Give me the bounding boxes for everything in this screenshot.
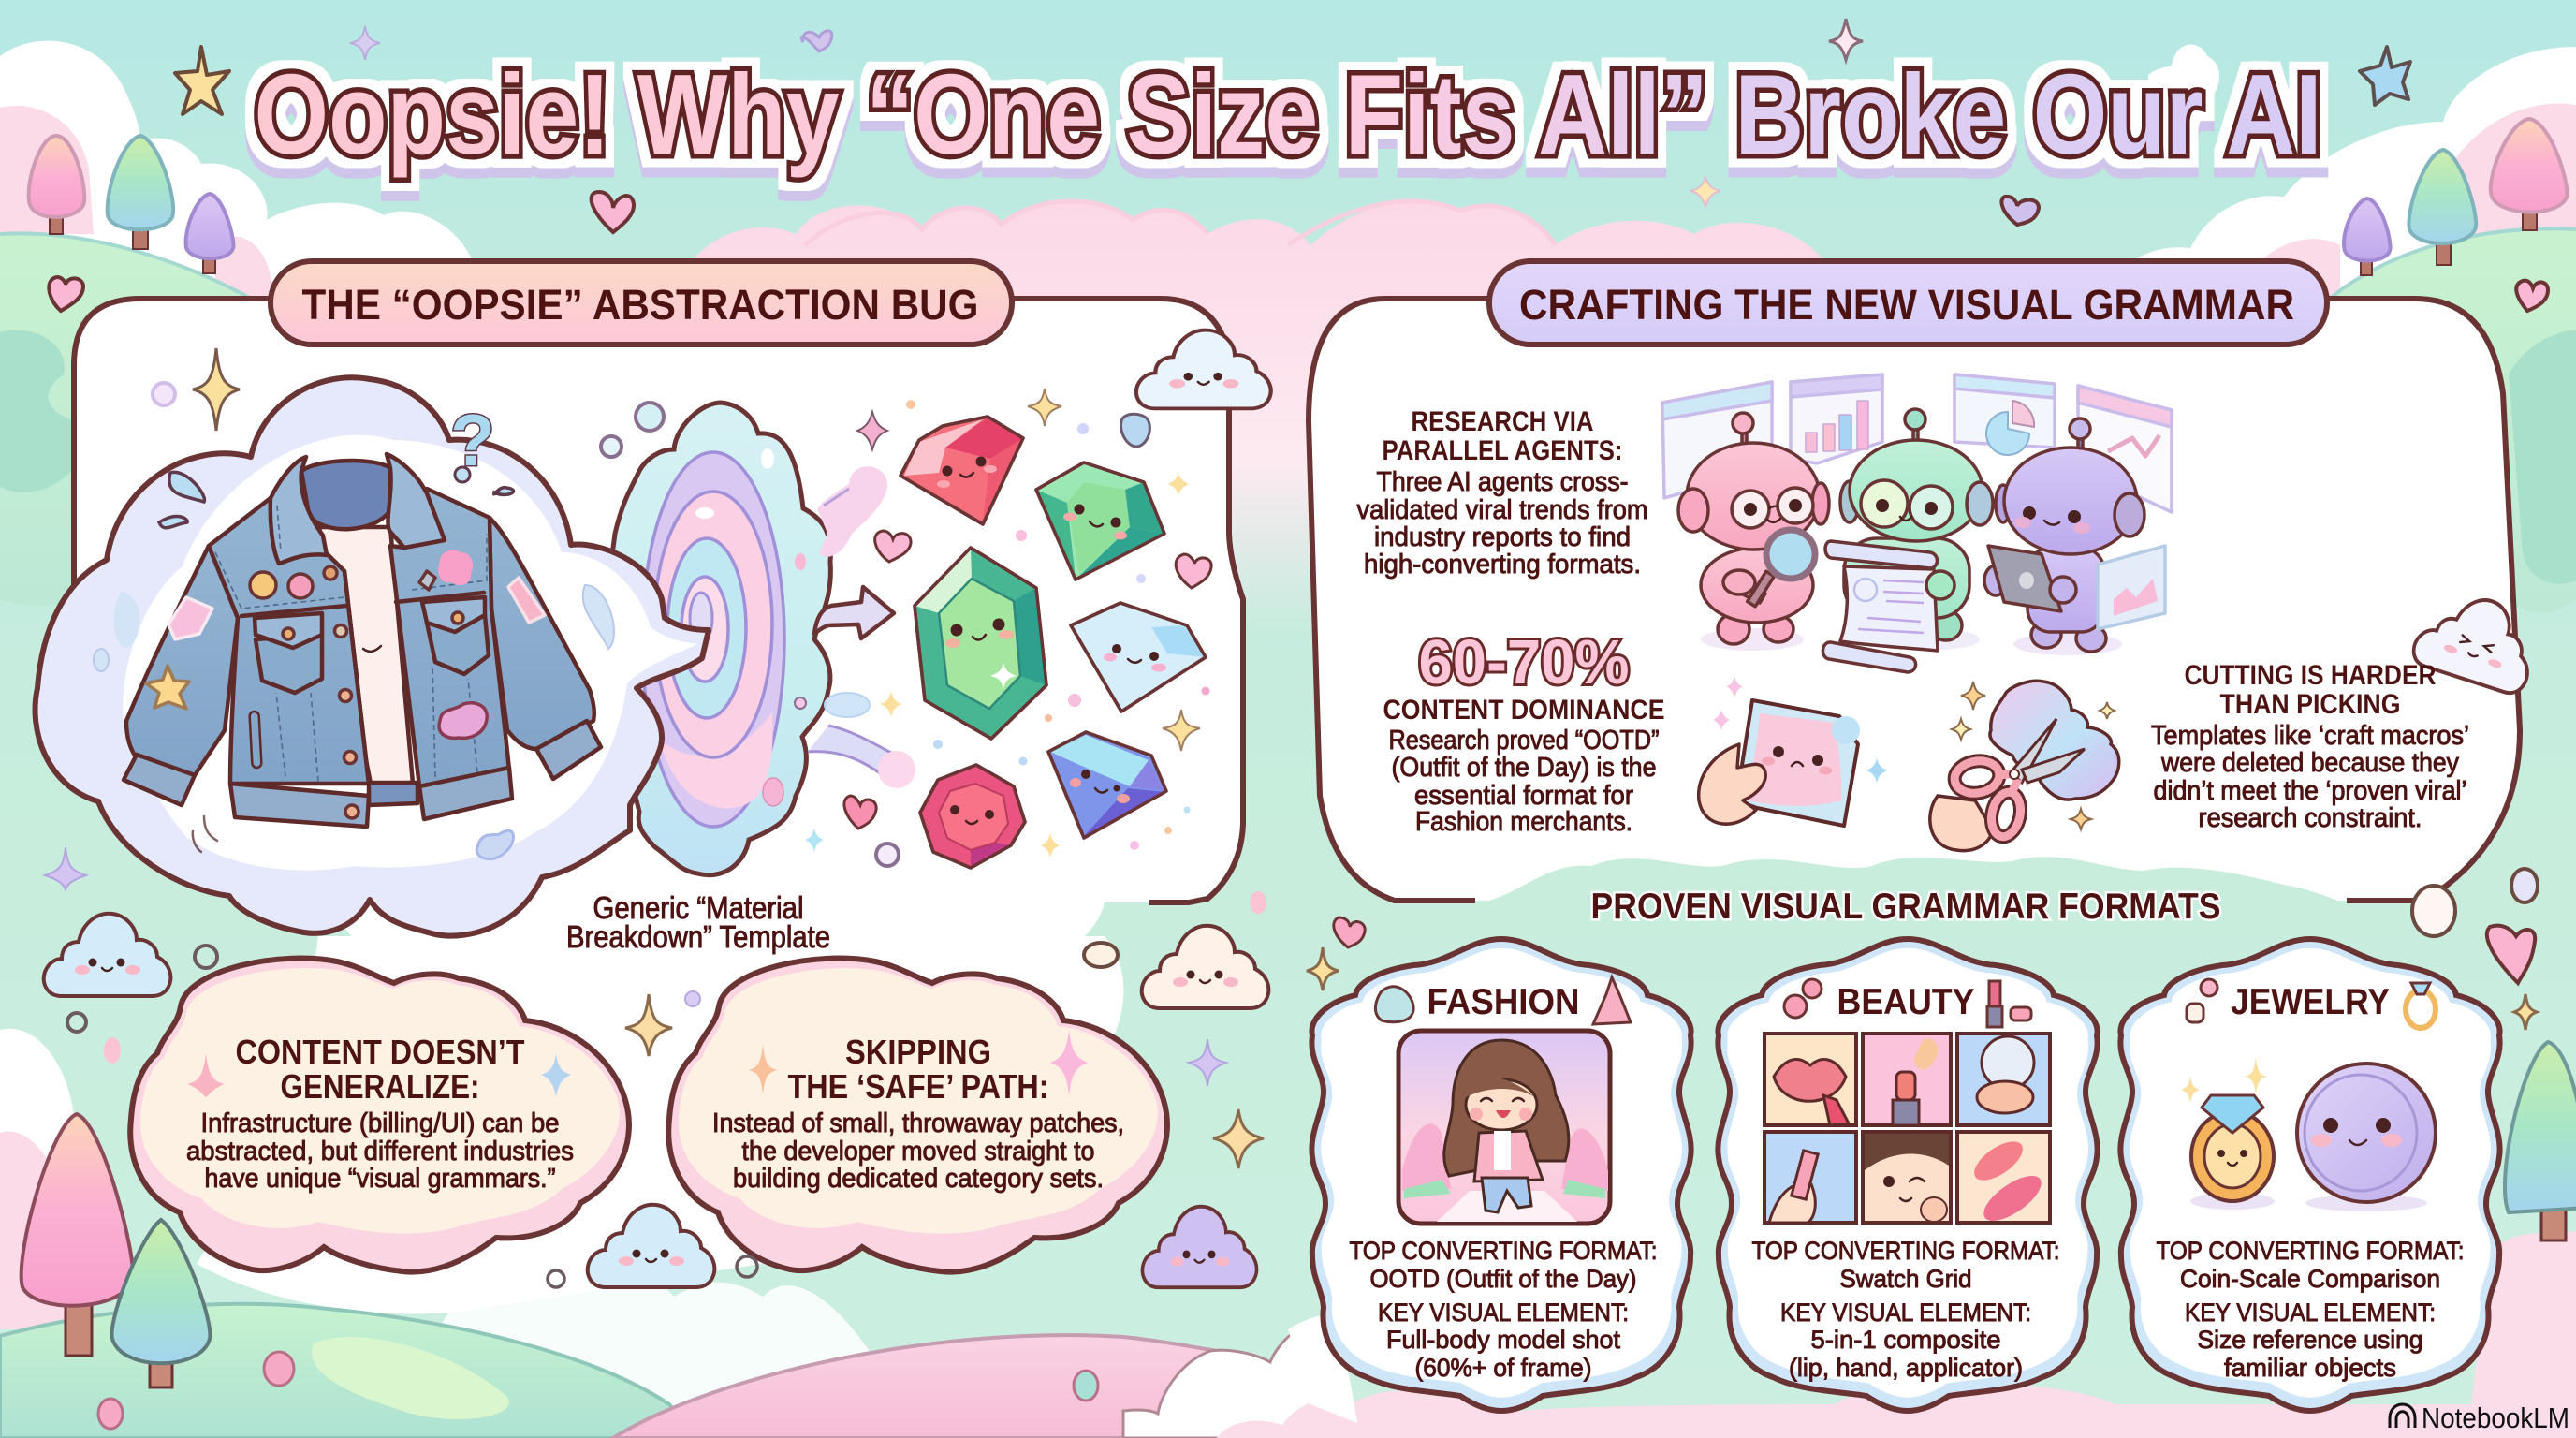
- cloud character: top right of panel: [1136, 330, 1271, 408]
- jacket patches and buttons: [146, 550, 545, 818]
- icon: lipstick: [1987, 981, 2031, 1027]
- text: jewelry details: [2157, 1237, 2464, 1382]
- robot: purple with tablet: [1984, 418, 2165, 655]
- callout: skipping safe path: SKIPPING: [845, 1033, 991, 1071]
- caption: generic template: [566, 890, 830, 954]
- text: cutting is harder: were deleted because they: [2160, 748, 2459, 778]
- callout: content doesn't generalize: have unique “visual grammars.”: [204, 1164, 556, 1194]
- gem: blue diamond: [1048, 732, 1166, 838]
- callout: skipping safe path: the developer moved straight to: [741, 1137, 1095, 1167]
- text: cutting is harder: CUTTING IS HARDER: [2185, 660, 2437, 691]
- decorative bubbles: [153, 383, 899, 866]
- text: research via parallel agents: high-converting formats.: [1364, 550, 1641, 580]
- stat: 60-70% content dominance: Research proved “OOTD”: [1389, 726, 1659, 756]
- card: jewelry: JEWELRY: [2231, 982, 2390, 1022]
- gem: light diamond: [1071, 603, 1206, 712]
- robot: pink with magnifier: [1678, 413, 1829, 651]
- trees: bottom left: [22, 1114, 210, 1387]
- illustration: OOTD model: [1398, 1031, 1610, 1224]
- callout: skipping safe path: [668, 959, 1167, 1272]
- heading pill: new visual grammar: CRAFTING THE NEW VISUAL GRAMMAR: [1519, 281, 2294, 329]
- panel: new visual grammar: [1309, 299, 2546, 936]
- background: left white and pink clouds with hill: [0, 41, 487, 606]
- cloud character: cutting: [2409, 582, 2546, 697]
- mint cloud under panel: [1475, 857, 2347, 936]
- text: beauty details: Swatch Grid: [1840, 1265, 1971, 1293]
- arrows: portal to gems: [808, 466, 915, 788]
- heading pill: new visual grammar: [1489, 261, 2327, 345]
- text: beauty details: TOP CONVERTING FORMAT:: [1752, 1237, 2059, 1265]
- text: fashion details: OOTD (Outfit of the Day): [1370, 1265, 1636, 1293]
- callout: skipping safe path: building dedicated category sets.: [733, 1164, 1104, 1194]
- decorations: title sparkles and hearts: [49, 19, 2548, 311]
- gem: red: [900, 417, 1023, 524]
- text: cutting is harder: Templates like ‘craft macros’: [2151, 721, 2469, 751]
- decorations: around cards: [1307, 869, 2538, 1030]
- text: fashion details: Full-body model shot: [1386, 1326, 1620, 1354]
- text: fashion details: [1350, 1237, 1657, 1382]
- icon: question mark: ?: [450, 399, 495, 481]
- gem: big emerald: [915, 548, 1046, 739]
- card: jewelry: [2120, 939, 2500, 1411]
- text: cutting is harder: [2151, 660, 2469, 833]
- illustration: swirl portal: [599, 403, 830, 875]
- text: fashion details: TOP CONVERTING FORMAT:: [1350, 1237, 1657, 1265]
- cloud character: blue left: [44, 914, 170, 996]
- background: white cloud behind callouts: [197, 936, 1123, 1313]
- callout: content doesn't generalize: abstracted, but different industries: [186, 1137, 574, 1167]
- decorative drops in cloud: [94, 585, 614, 859]
- stat: 60-70% content dominance: CONTENT DOMINANCE: [1383, 695, 1664, 726]
- illustration: ring and coin: [2181, 1058, 2436, 1211]
- background: top centre pink clouds: [674, 201, 1835, 637]
- illustration: screens behind robots: [1662, 374, 2172, 512]
- gem: small green: [1036, 462, 1164, 580]
- card: beauty: BEAUTY: [1837, 982, 1975, 1022]
- text: jewelry details: KEY VISUAL ELEMENT:: [2185, 1299, 2436, 1327]
- heading pill: abstraction bug: [271, 261, 1012, 345]
- stat: 60-70% content dominance: 60-70%: [1419, 627, 1629, 697]
- callout: content doesn't generalize: CONTENT DOESN’T: [236, 1033, 524, 1071]
- card: beauty: [1718, 939, 2098, 1411]
- icon: sparkle: [193, 348, 240, 431]
- illustration: hand holding sticker: [1699, 676, 1887, 826]
- card: fashion: FASHION: [1427, 982, 1580, 1022]
- text: research via parallel agents: [1357, 406, 1647, 580]
- text: research via parallel agents: industry reports to find: [1374, 522, 1631, 552]
- text: cutting is harder: research constraint.: [2198, 803, 2422, 833]
- cloud character: blue bottom: [588, 1205, 714, 1287]
- robot: green with scroll: [1822, 409, 1993, 672]
- text: cutting is harder: didn’t meet the ‘proven viral’: [2153, 776, 2467, 806]
- cloud character: purple bottom: [1143, 1207, 1257, 1287]
- cloud character: cream right: [1142, 926, 1268, 1008]
- text: jewelry details: Coin-Scale Comparison: [2180, 1265, 2440, 1293]
- text: jewelry details: Size reference using: [2198, 1326, 2422, 1354]
- icon: hearts: [1784, 979, 1822, 1018]
- illustration: swatch grid: [1764, 1034, 2050, 1229]
- callout: content doesn't generalize: [130, 959, 629, 1272]
- text: beauty details: (lip, hand, applicator): [1789, 1354, 2023, 1382]
- trees: top right: [2344, 119, 2567, 275]
- icon: heart and charm: [2187, 979, 2217, 1022]
- icon: sweat drops: [159, 472, 514, 528]
- text: beauty details: KEY VISUAL ELEMENT:: [1780, 1299, 2031, 1327]
- text: research via parallel agents: validated viral trends from: [1357, 495, 1647, 525]
- icon: small ring: [2406, 983, 2436, 1028]
- stat: 60-70% content dominance: [1383, 627, 1664, 837]
- callout: content doesn't generalize: GENERALIZE:: [281, 1067, 479, 1106]
- decorative hearts, sparkles and dots: [805, 389, 1211, 858]
- text: fashion details: KEY VISUAL ELEMENT:: [1378, 1299, 1629, 1327]
- stat: 60-70% content dominance: (Outfit of the Day) is the: [1391, 753, 1657, 783]
- callout: skipping safe path: Instead of small, throwaway patches,: [712, 1108, 1124, 1138]
- trees: top left: [29, 136, 233, 273]
- callout: content doesn't generalize: Infrastructure (billing/UI) can be: [200, 1108, 560, 1138]
- gem: ruby: [920, 765, 1025, 868]
- callout: skipping safe path: THE ‘SAFE’ PATH:: [788, 1067, 1048, 1106]
- stat: 60-70% content dominance: Fashion merchants.: [1415, 807, 1632, 837]
- thought cloud: [36, 377, 709, 936]
- panel: abstraction bug: [36, 299, 1271, 1002]
- heading pill: abstraction bug: THE “OOPSIE” ABSTRACTION BUG: [301, 281, 979, 329]
- text: beauty details: 5-in-1 composite: [1810, 1326, 2001, 1354]
- text: beauty details: [1752, 1237, 2059, 1382]
- decorative sparkles between callouts: [45, 847, 1266, 1287]
- motion lines: [193, 816, 217, 852]
- illustration: scissors cutting cloud: [1930, 681, 2119, 851]
- text: research via parallel agents: PARALLEL AGENTS:: [1382, 435, 1623, 466]
- text: jewelry details: familiar objects: [2224, 1354, 2396, 1382]
- icon: dress: [1593, 977, 1631, 1024]
- gem faces: [937, 457, 1166, 824]
- icon: perfume: [1375, 987, 1413, 1022]
- illustration: denim jacket: [124, 454, 601, 827]
- heading: proven formats: PROVEN VISUAL GRAMMAR FORMATS: [1591, 887, 2220, 927]
- text: research via parallel agents: Three AI agents cross-: [1376, 467, 1629, 497]
- caption: generic template: Generic “Material: [593, 890, 803, 925]
- background: right white and pink clouds with hill: [2106, 45, 2576, 613]
- card: fashion: [1311, 939, 1691, 1411]
- jacket stitching: [215, 506, 487, 782]
- stat: 60-70% content dominance: essential format for: [1414, 781, 1633, 811]
- tree: bottom right: [2505, 1042, 2576, 1240]
- text: jewelry details: TOP CONVERTING FORMAT:: [2157, 1237, 2464, 1265]
- text: cutting is harder: THAN PICKING: [2220, 689, 2400, 720]
- text: research via parallel agents: RESEARCH VIA: [1412, 406, 1593, 437]
- background: bottom clouds and hills: [0, 1029, 2576, 1438]
- caption: generic template: Breakdown” Template: [566, 919, 830, 954]
- text: fashion details: (60%+ of frame): [1415, 1354, 1591, 1382]
